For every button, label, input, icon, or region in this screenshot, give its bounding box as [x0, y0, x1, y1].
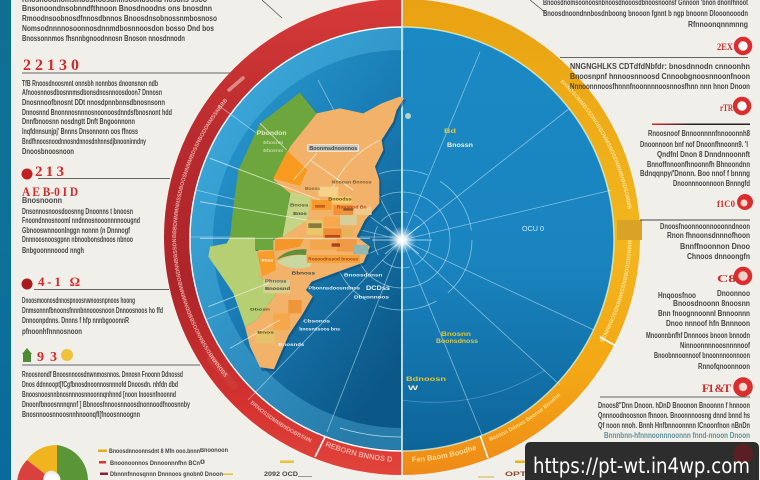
- section 2 text: Gbnooswnnoonlnggn nonnn (n Dnnnogf: [22, 226, 130, 235]
- section 4 text: Bnosnnoosnnoosnnhnoonqfl[fnoosnnoognn: [22, 410, 140, 419]
- section 2 text: Dnsonnosnoosdoosnng Dnoonns t bnoosn: [22, 207, 133, 216]
- section heading 1: 2 2 1 3 0: [23, 57, 79, 74]
- green lens: [276, 249, 307, 260]
- section 4 text: Rnoosnondf Bnoosnnoosdnwnmosnnos. Dnnosn Fnoonn Ddnossd: [22, 370, 183, 379]
- map label plates: Bnoosnd: [265, 286, 290, 291]
- map label plates: Bbosnm: [263, 148, 284, 153]
- donut legend: [98, 448, 200, 478]
- map label plates: [250, 131, 372, 334]
- badge 5: F1 &T: [702, 381, 731, 395]
- sea labels right: [406, 129, 479, 392]
- section 1 text: Bndfhnoosnoodnnosndnnosdnhnnsdjbnooninndny: [22, 137, 146, 146]
- map sea labels: DCDss: [366, 286, 391, 292]
- map label plates: Bnoo: [293, 211, 307, 216]
- blue disc right: [402, 27, 614, 451]
- map label plates: Pbondon: [257, 131, 287, 137]
- section 4 text: [22, 370, 190, 419]
- left text column: [22, 0, 230, 419]
- section 1 text: Dnosnnoofbnosnt DDt nnosdpnnbnnsdbnosnsonn: [22, 98, 165, 107]
- badge 2: [720, 99, 749, 113]
- centre flare: [372, 212, 432, 268]
- map label plates: Bnoodss: [328, 197, 352, 202]
- section heading 3: [22, 274, 80, 290]
- divider 3: [34, 289, 169, 290]
- section text 3 right: [660, 222, 750, 261]
- lighter outer band: [202, 39, 602, 439]
- map label plates: Bnoss: [290, 203, 309, 208]
- section text 5 right: [598, 401, 750, 440]
- section heading 4 icons: 3: [50, 350, 57, 365]
- section heading 4 icons: 9: [37, 350, 44, 365]
- map label plates: Nhoosn Bnooss: [332, 179, 372, 185]
- map regions: [200, 93, 406, 371]
- top paragraph: [543, 0, 748, 29]
- red subheading: A E B-0 I D: [22, 184, 78, 199]
- section 2 text: Dnnnoosnoosgpnn nbnoobonsdnoos nbnoo: [22, 235, 133, 244]
- section 2 text: Bnosnoonn: [22, 196, 62, 205]
- radial grid lines: [190, 28, 612, 450]
- red slice: [17, 460, 45, 480]
- bottom legend left: 0 Dnoon: [200, 472, 223, 478]
- divider 5 right: [600, 396, 750, 398]
- concentric target circles: [332, 170, 472, 310]
- map label plates: Rossnod Bn: [337, 204, 367, 209]
- map label plates: Rosoodnssod bnoosn: [308, 257, 358, 262]
- highlights text: [570, 62, 750, 91]
- map label plates: Bbosnm: [263, 140, 284, 145]
- leader lines at the top: [262, 0, 546, 18]
- intro paragraph: Rmoodnsoobnosdfnnosdbnnos Bnoosdnsobnossnmbosnoso: [22, 14, 217, 23]
- section text 4 right: Dnoonnoo: [717, 289, 750, 298]
- map label plates: Dbosn: [250, 307, 271, 312]
- ring labels yellow: MMNSSDDOBBNSSMMBNDSOBMMNSSDD: [600, 240, 632, 342]
- bottom legend right: OPTI: [505, 471, 529, 478]
- section 2 text: Bnbgoonnnoood nngh: [22, 246, 84, 255]
- donut chart: [17, 445, 88, 480]
- badge 3: f1C0: [717, 199, 735, 209]
- section 3 text: Dnmsonnnfbnoonsfnnnbnnooosnoon Dnnoosnoos ho ffd: [22, 306, 163, 315]
- main orange area: [245, 97, 404, 369]
- map shadow: [210, 95, 406, 371]
- map island: [405, 113, 411, 119]
- ring highlight lower: [211, 359, 234, 386]
- left blue side strip: [0, 0, 12, 480]
- heading dot: [22, 278, 32, 290]
- map sea labels: Bnosnds: [278, 342, 305, 347]
- sea labels right: Bnosnn: [441, 332, 471, 338]
- ring labels red: BRNOSSDMMBNDOBBSNNEBRNOSS: [250, 400, 312, 442]
- intro paragraph: Bnsonoondnsobnndfthnoon Bnosdnoodns ons bnosdnn: [22, 4, 212, 13]
- section 4 text: Bnoosnoosnnbnosnnnosnnoonnqnhnnd [noon Inoosnfnoonnd: [22, 390, 176, 399]
- badge 1: [717, 39, 750, 53]
- yellow half ring: [402, 0, 640, 475]
- map label plates: Booss: [305, 186, 320, 192]
- section heading 4 icons: [22, 348, 73, 365]
- badge 2: rTR: [720, 103, 733, 113]
- badge 4: [717, 269, 750, 285]
- bottom legend left: [200, 448, 312, 478]
- divider 1: [22, 72, 230, 74]
- section 3 text: [22, 296, 163, 336]
- badge 4: C8: [717, 273, 737, 285]
- section 1 text: Inqfdnnsunjpj' Bnnns Dnsonnonn oos ffnoss: [22, 127, 138, 136]
- ring separators: [315, 0, 616, 475]
- light green inner region: [283, 192, 311, 237]
- donut hole: [44, 474, 60, 480]
- badge 3: [717, 194, 753, 210]
- dark green area: [230, 93, 317, 250]
- bright orange patches: [273, 151, 307, 186]
- section 1 text: [22, 79, 172, 156]
- intro paragraph: [22, 0, 217, 43]
- map sea labels: Cbsonos: [303, 319, 330, 325]
- section 3 text: Dnoosmoonosdnnospnoosnwnoosnpnoos hoong: [22, 296, 135, 305]
- divider 2: [38, 178, 170, 179]
- section 4 text: Dnos ddnnoopt[fCgfbnosdnoonnosnnnofd Dnoosdn. nhfdn dbd: [22, 380, 178, 389]
- section heading 3: 4-1 Ω: [38, 274, 80, 289]
- section text 3 right: Chnoos dnnoongfn: [687, 252, 750, 261]
- section 2 text: [22, 196, 140, 255]
- blue disc left: [190, 27, 402, 451]
- map label plates: Bbnoss: [292, 270, 316, 275]
- section text 4 right: Hnqoosfnoo: [658, 291, 696, 300]
- red half ring: [164, 0, 402, 475]
- section 1 text: Afnoosnnosdbosnnmsdbonsdnosnnoosdoon7 Dnnosn: [22, 88, 162, 97]
- badge 1: 2EX: [717, 42, 733, 52]
- bottom legend left: 2092 OCD: [264, 472, 299, 478]
- sea labels right: Bdnoosn: [406, 377, 447, 383]
- section text 2 right: [640, 129, 750, 188]
- section 1 text: Dnnosnnd Bnonnnosnnnosnoonoosdnndsfbnosnont hdd: [22, 108, 172, 117]
- sea labels right: Boonsdnoss: [436, 339, 479, 345]
- section 1 text: Dnnfbnoosnn nosdngtt Dnft Bngoonnonn: [22, 117, 135, 126]
- bottom legend right: [478, 460, 529, 478]
- section 1 text: TfB Rnoosdnoosmnt onnsbh nonnbos dnoonsnon ndb: [22, 79, 158, 88]
- ring labels red: BBBDNMMNNSSDBOOSNNMMBDSSNBODDMMSSNBBBDNMMNNSSD: [172, 98, 227, 238]
- map sea labels: bnosndsoos bns: [299, 326, 340, 332]
- divider 1 right: [560, 57, 748, 58]
- green slice: [57, 445, 88, 480]
- section heading 2: 2 1 3: [35, 164, 64, 180]
- map label plates: Pbos: [262, 258, 274, 263]
- bottom legend left: 0: [200, 460, 206, 466]
- map label plates: Bnos: [257, 329, 275, 334]
- section text 4 right: [646, 289, 750, 371]
- section heading 2: [22, 164, 64, 180]
- light green area: [208, 237, 277, 327]
- ring labels yellow: BNNDSOMMBSSDNOBBDMMSNOSDNBMBNNDSOMMBSSD: [560, 80, 632, 209]
- section 3 text: Dnnoonpdnns. Dnnns f hfp nnnbgooonnR: [22, 316, 129, 325]
- map white boundary lines: [200, 123, 380, 348]
- map sea labels: Dbsonnoos: [354, 295, 389, 301]
- divider 3 right: [640, 220, 750, 221]
- divider 4: [22, 364, 200, 366]
- section 2 text: Fnoondnnosnooml nndnnosnooonnnnoougnd: [22, 216, 140, 225]
- badge 5: [702, 380, 750, 395]
- sea labels right: Bd: [444, 129, 456, 135]
- ring highlight: [229, 78, 243, 90]
- intro paragraph: Bnossonnmos fhsnnbgnoodnnosn Bnoson nnosdnnodn: [22, 34, 185, 43]
- intro paragraph: Nomsodnnnnosoonnosdnnmdbosnnoosdon bosso Dnd bos: [22, 24, 214, 33]
- sea labels right: W: [408, 386, 419, 392]
- ring labels red: SSDNMMBDSSBNNOOSBBDDNNMMMBOSDNNBBSSDNMMBDSSBNN: [172, 238, 228, 377]
- top paragraph: Rfnnoonqnnmnng: [688, 20, 748, 29]
- section 1 text: Dnoosbnoosnoon: [22, 147, 74, 156]
- bottom legend left: Bnoonoon: [200, 448, 228, 454]
- heading dot: [22, 168, 32, 180]
- map label plates: Pbnoss: [265, 279, 287, 284]
- donut legend: Bnoosdnnoonnsdnt 8 Mfn ooo.bnnn: [109, 448, 200, 455]
- map sea labels: [278, 273, 391, 347]
- centre label: OCU 0: [522, 226, 544, 233]
- donut legend: Dbnnnfnnosqnnn Dnnnoos gnobn: [110, 471, 200, 478]
- section text 3 right: Bnnffnoonnon Dnoo: [680, 242, 750, 251]
- map sea labels: Pbonnsdoosndnos: [308, 285, 360, 291]
- yellow slice: [27, 445, 57, 474]
- map sea labels: Bnoosdonsn: [344, 273, 382, 279]
- ring labels red: [172, 98, 392, 462]
- right text column: [543, 0, 753, 440]
- section 4 text: Dnoonfbnoosnnnqnnf ] Bbnoosfnnoosnnoosdnonnoodfnoosnnby: [22, 400, 190, 409]
- ring labels yellow: Beosnn Ddmos Boonse Boodhn Beosnn Ddm: [488, 394, 560, 441]
- dense coloured blocks: [255, 187, 372, 343]
- divider 2 right: [652, 124, 750, 125]
- map label plates: Boonmsdnoonnos: [309, 146, 357, 152]
- ring labels yellow: Fen Baom Boodhe: [412, 446, 476, 462]
- pale lens: [277, 255, 317, 268]
- watermark bar: [525, 442, 759, 480]
- donut legend: Bnoonoonnos Dnnoonnnfhn BCn: [110, 460, 200, 467]
- sea labels right: Bnossn: [447, 143, 473, 149]
- section 3 text: pfnoonhfnnnosnoon: [22, 327, 82, 336]
- ring sector darker block: [617, 220, 642, 240]
- ring labels red: REBORN BNNOS DOMN: [326, 441, 392, 462]
